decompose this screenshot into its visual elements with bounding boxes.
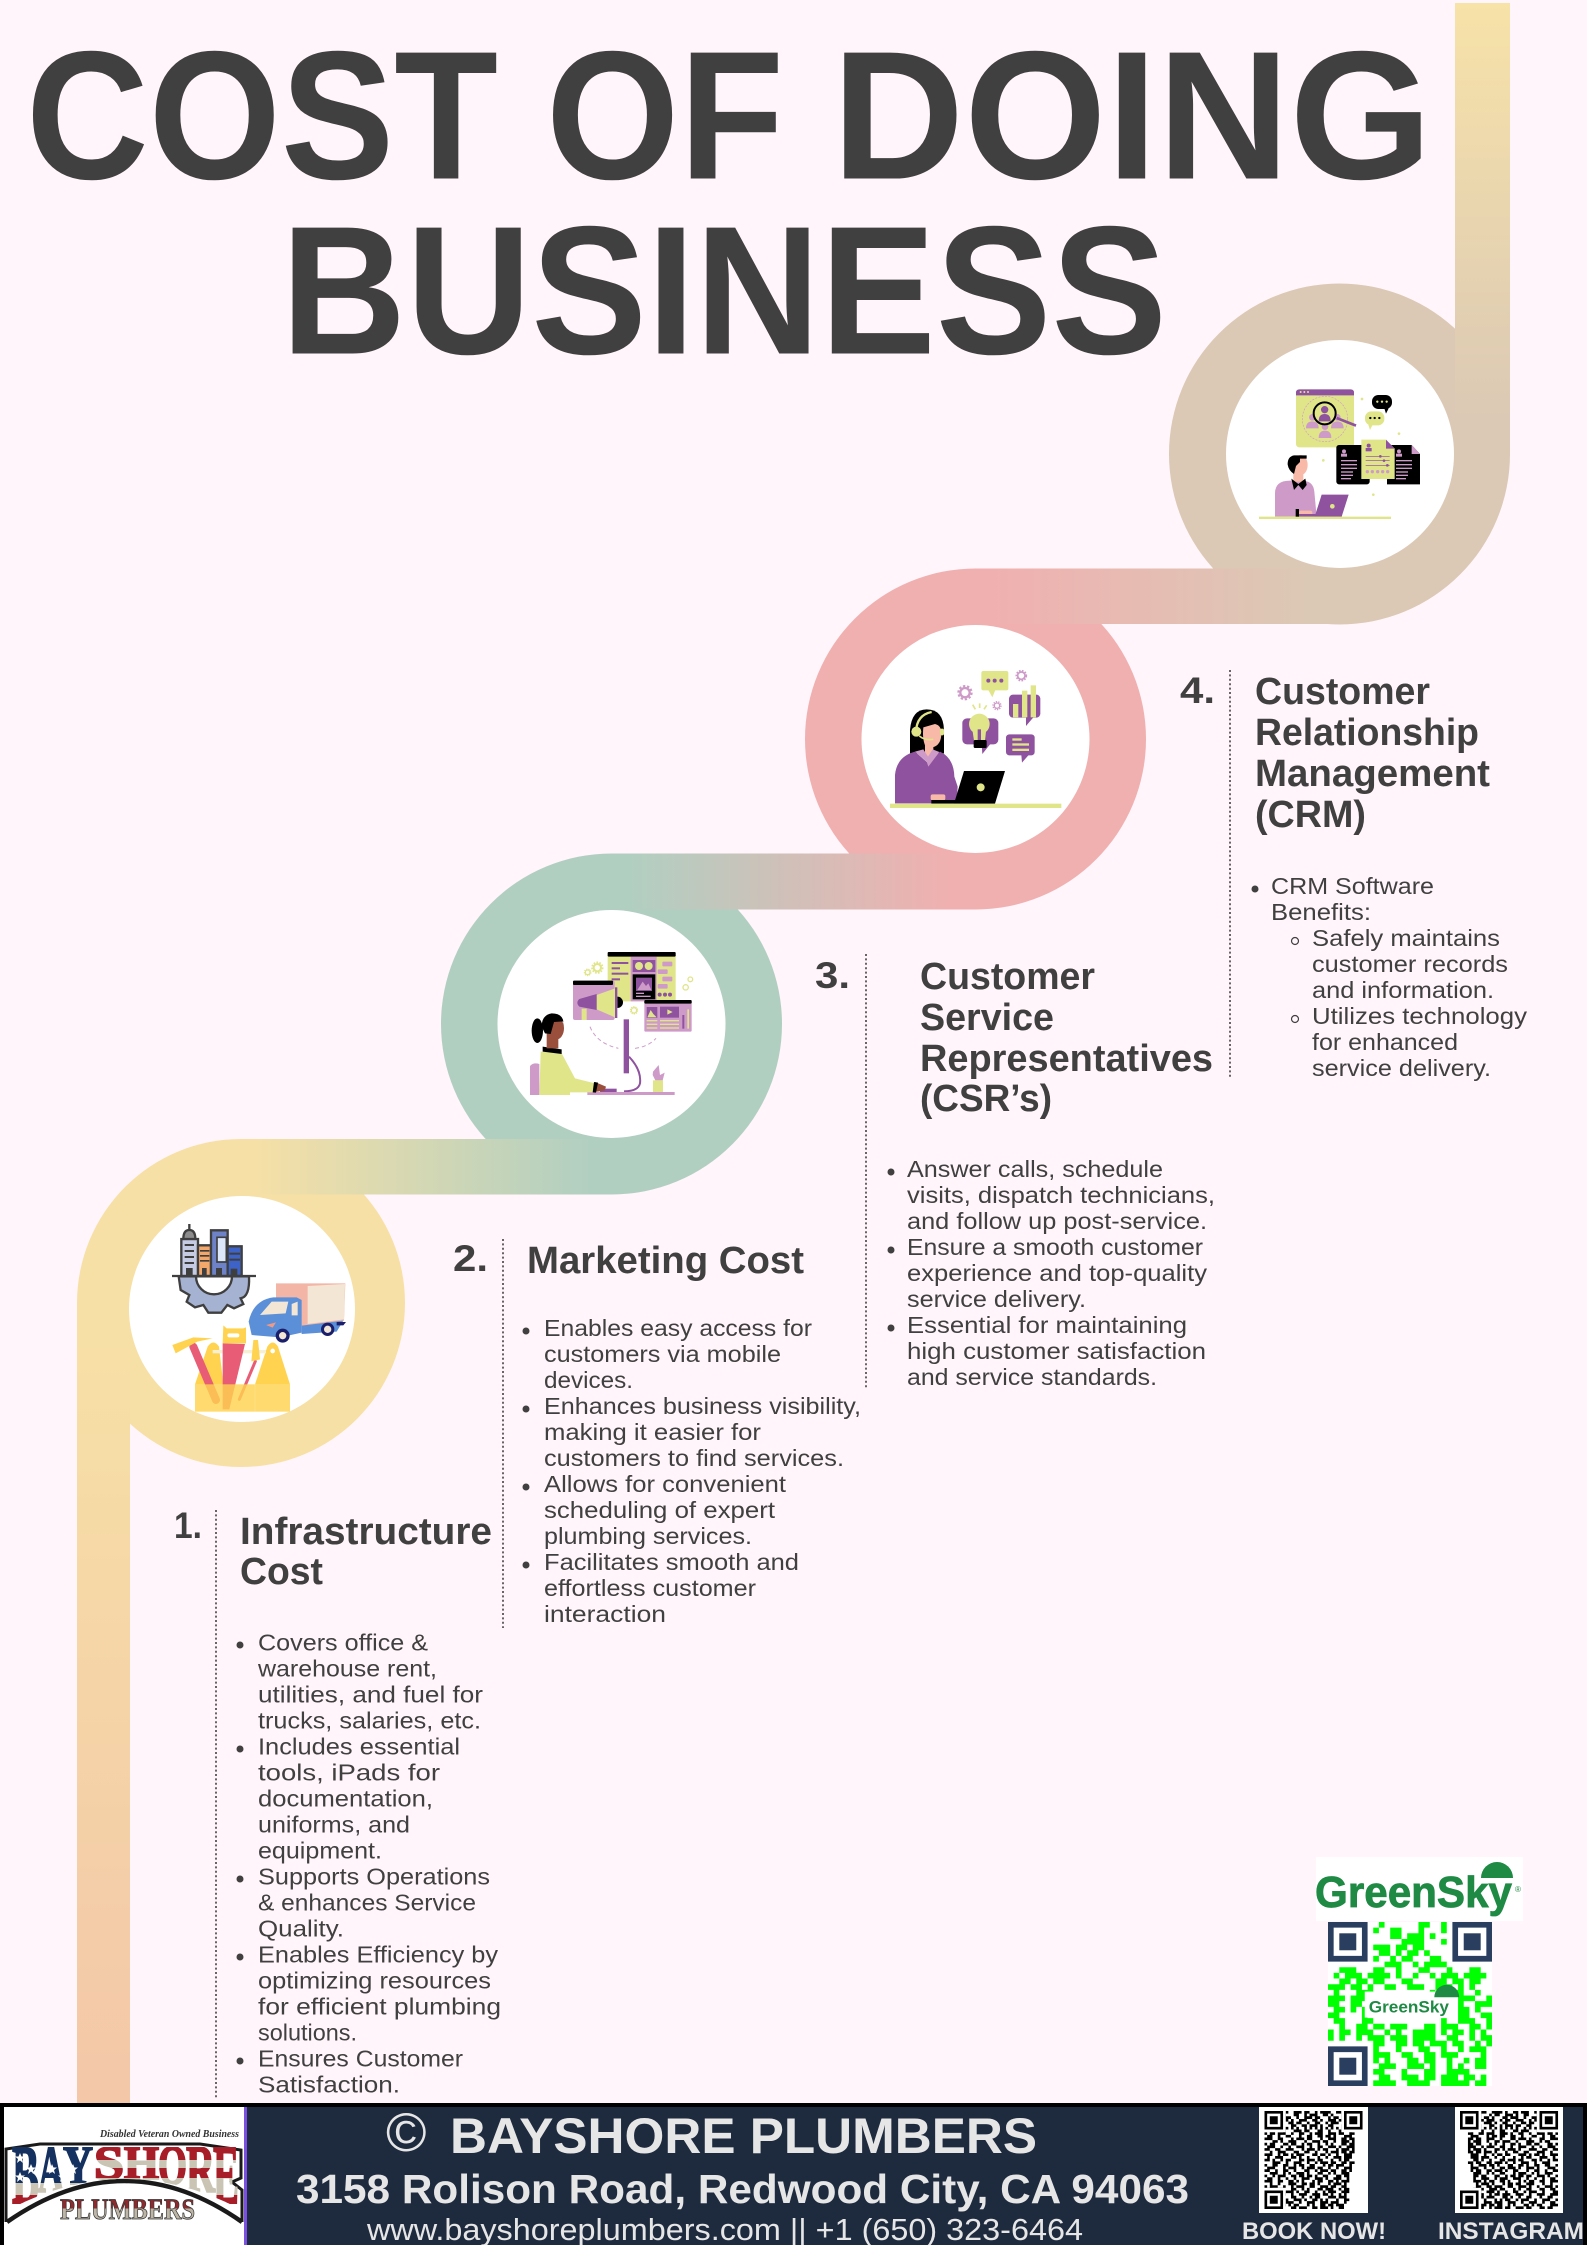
bullet list 4: for enhanced xyxy=(1312,1029,1458,1055)
company logo: Y xyxy=(63,2135,93,2197)
heading 3: Representatives xyxy=(920,1038,1213,1080)
QR: book now xyxy=(1259,2107,1368,2213)
company logo: Disabled Veteran Owned Business xyxy=(99,2128,239,2140)
bullet list 2: devices. xyxy=(544,1367,633,1393)
heading 1: Cost xyxy=(240,1551,323,1593)
bullet list 1: & enhances Service xyxy=(258,1890,476,1916)
company name: BAYSHORE PLUMBERS xyxy=(450,2108,1037,2164)
address: 3158 Rolison Road, Redwood City, CA 94063 xyxy=(296,2166,1189,2212)
bullet list 1: trucks, salaries, etc. xyxy=(258,1708,481,1734)
panel: 2. marketing cost xyxy=(453,1238,861,1628)
GreenSky logo: ® xyxy=(1515,1885,1521,1894)
title: OF xyxy=(546,12,784,218)
company logo: E xyxy=(213,2129,239,2222)
company logo: B xyxy=(12,2129,39,2222)
bullet list 4: Safely maintains xyxy=(1312,925,1500,951)
panel: 1. infrastructure cost xyxy=(174,1505,501,2098)
bullet list 1: Quality. xyxy=(258,1916,344,1942)
bullet list 2: customers via mobile xyxy=(544,1341,781,1367)
company logo: R xyxy=(186,2131,216,2207)
bullet list 1: Covers office & xyxy=(258,1630,428,1656)
bullet list 3: Answer calls, schedule xyxy=(907,1156,1163,1182)
QR: instagram xyxy=(1455,2107,1563,2213)
GreenSky logo: GreenSky xyxy=(1315,1868,1512,1917)
bullet list 4: Utilizes technology xyxy=(1312,1003,1528,1029)
bullet list 1: optimizing resources xyxy=(258,1968,491,1994)
bullet list 2: Facilitates smooth and xyxy=(544,1549,799,1575)
bullet list 1: tools, iPads for xyxy=(258,1760,440,1786)
bullet list 1: Satisfaction. xyxy=(258,2072,400,2098)
number 1: 1. xyxy=(174,1505,202,1546)
bullet list 3: service delivery. xyxy=(907,1286,1086,1312)
bullet list 2: Enables easy access for xyxy=(544,1315,812,1341)
company logo: H xyxy=(124,2137,159,2190)
bullet list 2: customers to find services. xyxy=(544,1445,844,1471)
bullet list 1: Enables Efficiency by xyxy=(258,1942,499,1968)
bullet list 2: making it easier for xyxy=(544,1419,761,1445)
bullet list 3: and service standards. xyxy=(907,1364,1157,1390)
bullet list 1: Includes essential xyxy=(258,1734,460,1760)
bullet list 1: utilities, and fuel for xyxy=(258,1682,483,1708)
icon: marketing desk scene xyxy=(530,952,693,1095)
company logo: PLUMBERS xyxy=(60,2193,195,2226)
title: BUSINESS xyxy=(281,188,1167,392)
panel: 3. customer service representatives xyxy=(815,954,1215,1390)
bullet list 2: scheduling of expert xyxy=(544,1497,776,1523)
heading 3: Customer xyxy=(920,956,1095,998)
company name: © xyxy=(386,2101,427,2163)
GreenSky QR code xyxy=(1328,1922,1498,2086)
bullet list 3: Essential for maintaining xyxy=(907,1312,1187,1338)
bullet list 1: uniforms, and xyxy=(258,1812,410,1838)
company logo: A xyxy=(38,2131,64,2207)
icon: infrastructure, truck and tools xyxy=(172,1224,346,1412)
bullet list 2: Enhances business visibility, xyxy=(544,1393,861,1419)
bullet list 2: plumbing services. xyxy=(544,1523,752,1549)
heading 1 xyxy=(240,1511,492,1593)
title: DOING xyxy=(832,12,1432,218)
heading 4: Customer xyxy=(1255,671,1430,713)
GreenSky QR code: GreenSky xyxy=(1369,1997,1450,2016)
bullet list 3: visits, dispatch technicians, xyxy=(907,1182,1215,1208)
icon: CRM person with profiles xyxy=(1259,389,1420,519)
company logo: O xyxy=(158,2135,187,2197)
bullet list 3: and follow up post-service. xyxy=(907,1208,1207,1234)
bullet list 4: service delivery. xyxy=(1312,1055,1491,1081)
bullet list 4: Benefits: xyxy=(1271,899,1371,925)
bullet list 3: Ensure a smooth customer xyxy=(907,1234,1203,1260)
bullet list 3: high customer satisfaction xyxy=(907,1338,1206,1364)
title: COST xyxy=(26,12,498,218)
bullet list 2: interaction xyxy=(544,1601,666,1627)
label: instagram: INSTAGRAM xyxy=(1438,2218,1584,2245)
panel: 4. customer relationship management xyxy=(1180,670,1528,1081)
icon: customer service agent xyxy=(890,671,1061,808)
bullet list 1: equipment. xyxy=(258,1838,382,1864)
number 4: 4. xyxy=(1180,670,1215,711)
company logo: S xyxy=(94,2137,124,2190)
bullet list 1: Ensures Customer xyxy=(258,2046,463,2072)
bullet list 1: solutions. xyxy=(258,2020,357,2046)
footer band xyxy=(0,2101,1587,2245)
heading 2: Marketing Cost xyxy=(527,1240,804,1282)
bullet list 1 xyxy=(236,1630,501,2098)
bullet list 4: and information. xyxy=(1312,977,1494,1003)
heading 3 xyxy=(920,956,1213,1120)
company logo xyxy=(4,2107,244,2245)
bullet list 1: warehouse rent, xyxy=(257,1656,437,1682)
heading 4: (CRM) xyxy=(1255,794,1366,836)
bullet list 1: documentation, xyxy=(258,1786,433,1812)
label: book now: BOOK NOW! xyxy=(1242,2218,1386,2245)
bullet list 1: for efficient plumbing xyxy=(258,1994,501,2020)
title xyxy=(26,12,1432,392)
bullet list 1: Supports Operations xyxy=(258,1864,490,1890)
number 3: 3. xyxy=(815,955,850,996)
bullet list 4 xyxy=(1252,873,1528,1081)
bullet list 4: customer records xyxy=(1312,951,1508,977)
bullet list 2: effortless customer xyxy=(544,1575,756,1601)
heading 3: Service xyxy=(920,997,1054,1039)
heading 4: Management xyxy=(1255,753,1490,795)
bullet list 2 xyxy=(522,1315,861,1627)
bullet list 3: experience and top-quality xyxy=(907,1260,1208,1286)
bullet list 2: Allows for convenient xyxy=(544,1471,787,1497)
heading 4 xyxy=(1255,671,1490,836)
heading 1: Infrastructure xyxy=(240,1511,492,1553)
bullet list 3 xyxy=(888,1156,1215,1390)
number 2: 2. xyxy=(453,1238,488,1279)
heading 3: (CSR’s) xyxy=(920,1078,1052,1120)
bullet list 4: CRM Software xyxy=(1271,873,1434,899)
heading 4: Relationship xyxy=(1255,712,1479,754)
